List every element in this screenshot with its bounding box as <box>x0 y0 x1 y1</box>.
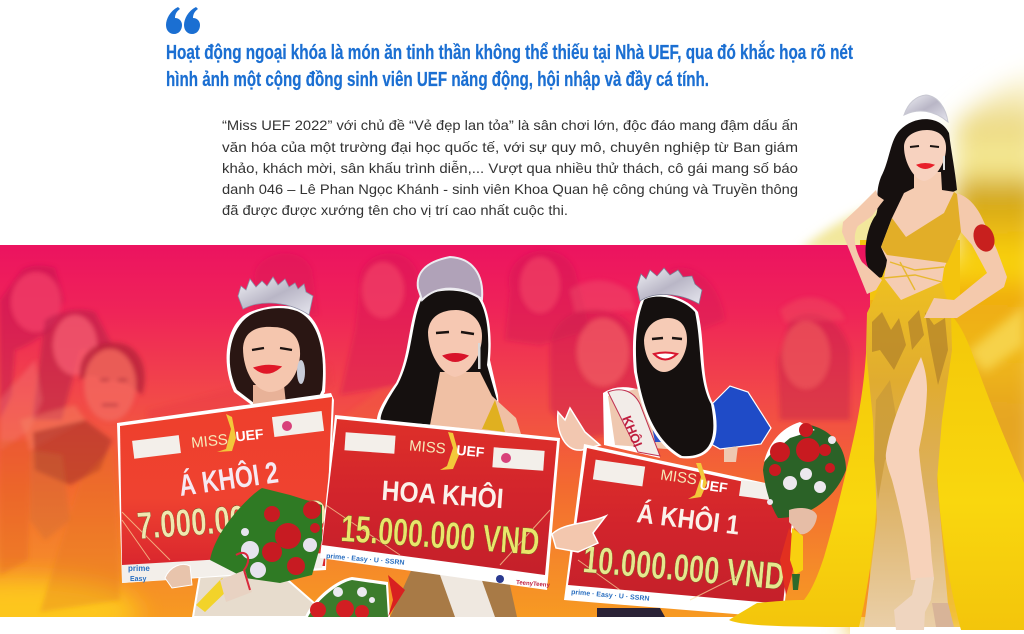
bare leg <box>886 357 934 580</box>
board: Hoa khôi: TeenyTeeny <box>516 580 551 589</box>
body text block: “Miss UEF 2022” với chủ đề “Vẻ đẹp lan tỏa” là sân chơi lớn, độc đáo mang đậm dấu ấn <box>222 117 798 133</box>
board: Á khôi 2: Á KHÔI 2 <box>177 455 280 503</box>
portrait: Hoa khôi <box>377 257 521 617</box>
board: Á khôi 1 <box>564 444 803 618</box>
head <box>904 130 946 181</box>
crown <box>418 257 482 300</box>
dress bodice <box>881 192 961 263</box>
crown <box>904 95 948 122</box>
flowers left bouquet <box>196 488 322 612</box>
board: Á khôi 1: 10.000.000 VND <box>581 539 786 599</box>
gold backdrop swoosh <box>800 65 1024 634</box>
board: Á khôi 1: prime · Easy · U · SSRN <box>571 589 650 603</box>
body text block: khảo, khách mời, sân khấu trình diễn,... Vượt qua nhiều thử thách, cô gái mang số báo <box>222 160 798 176</box>
board: Á khôi 2: prime <box>128 564 150 573</box>
board: Hoa khôi: prime · Easy · U · SSRN <box>326 553 405 567</box>
bottom left yellow glow <box>0 578 140 634</box>
hand with finger heart <box>552 516 606 552</box>
board: Á khôi 2: MISS <box>190 431 229 452</box>
board: Á khôi 2 <box>117 393 334 588</box>
heading: pull quote <box>166 40 853 91</box>
board: Á khôi 2: 7.000.000 VND <box>136 493 328 548</box>
portrait: Á khôi 1 <box>558 268 771 617</box>
board: Hoa khôi: MISS <box>408 437 446 458</box>
right arm <box>924 193 1007 318</box>
right cape <box>937 310 1024 630</box>
flowers right bouquet <box>763 422 846 534</box>
red to orange gradient band <box>0 245 870 617</box>
chest and neck <box>881 172 961 300</box>
armband <box>970 221 998 255</box>
board: Á khôi 1: Á KHÔI 1 <box>635 497 741 541</box>
flowers center bouquet <box>305 575 405 619</box>
body text block: đã được được xướng tên cho vị trí cao nhất cuộc thi. <box>222 202 568 218</box>
shoes <box>894 577 934 630</box>
quote mark icon <box>166 7 200 34</box>
heading: pull quote: hình ảnh một cộng đồng sinh viên UEF năng động, hội nhập và đầy cá tính. <box>166 69 709 91</box>
dress skirt <box>864 277 952 627</box>
left cape <box>729 330 877 627</box>
body text block: danh 046 – Lê Phan Ngọc Khánh - sinh viên Khoa Quan hệ công chúng và Truyền thông <box>222 181 798 197</box>
board: Hoa khôi: 15.000.000 VND <box>339 508 541 564</box>
board: Hoa khôi <box>320 415 560 590</box>
crown <box>238 277 313 315</box>
crown <box>637 268 702 304</box>
left arm <box>842 190 884 294</box>
board: Á khôi 1: MISS <box>659 467 698 489</box>
portrait: Á khôi 2 <box>193 277 330 617</box>
body text block: văn hóa của một trường đại học quốc tế, với sự quy mô, chuyên nghiệp từ Ban giám <box>222 139 798 155</box>
board: Á khôi 2: UEF <box>235 426 265 444</box>
board: Á khôi 2: Easy <box>130 576 146 583</box>
hair back <box>865 119 957 278</box>
ghost background portraits <box>0 250 850 634</box>
board: Hoa khôi: UEF <box>456 442 486 460</box>
body text block <box>222 117 798 218</box>
board: Hoa khôi: HOA KHÔI <box>381 474 505 514</box>
portrait: Á khôi 1: KHÔI <box>619 414 645 449</box>
board: Á khôi 1: UEF <box>699 476 729 496</box>
white fill under backdrop <box>850 627 1024 634</box>
model: Hoa khôi in gold dress <box>729 95 1024 630</box>
